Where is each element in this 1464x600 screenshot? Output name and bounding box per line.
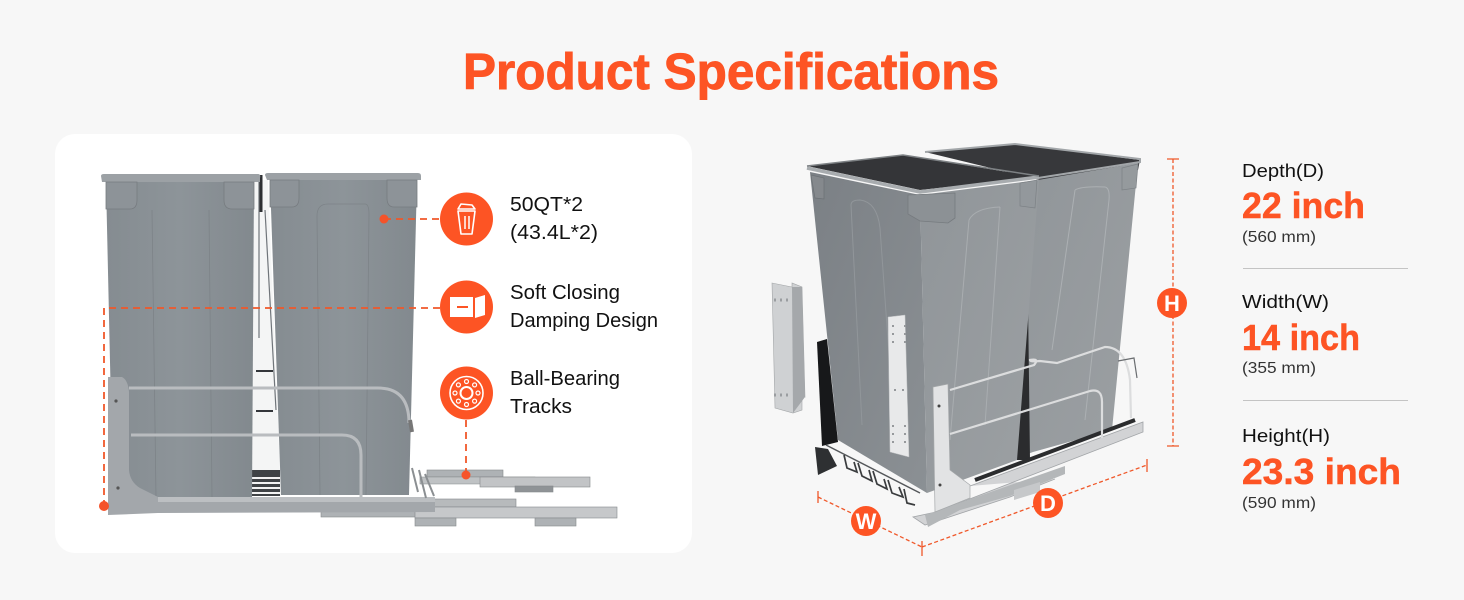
spec: width xyxy=(1242,291,1360,377)
spec: height: Height(H) xyxy=(1242,425,1330,446)
back rails xyxy=(321,470,617,526)
spec: height: (590 mm) xyxy=(1242,495,1316,512)
dimension: width: W xyxy=(856,509,877,534)
label: capacity: 50QT*2 xyxy=(510,194,583,216)
left bin xyxy=(101,174,260,497)
rear bin xyxy=(925,144,1140,460)
loose side bracket xyxy=(772,283,805,413)
front bin xyxy=(807,155,1039,493)
label: ball bearing: Tracks xyxy=(510,396,572,418)
product image: side view of pull-out bins xyxy=(101,173,617,526)
callout lines xyxy=(104,219,466,506)
spec: width: 14 inch xyxy=(1242,317,1360,358)
icon: soft closing drawer xyxy=(440,280,493,334)
frame: wires, rails and bracket xyxy=(815,347,1143,527)
label: soft closing: Soft Closing xyxy=(510,282,620,304)
product image: isometric bins xyxy=(772,144,1187,556)
spec: width: (355 mm) xyxy=(1242,360,1316,377)
spec: width: Width(W) xyxy=(1242,291,1329,312)
spec: height: 23.3 inch xyxy=(1242,451,1401,492)
spec: depth xyxy=(1242,160,1365,246)
dimension: depth xyxy=(922,459,1147,547)
label: capacity xyxy=(510,194,598,244)
white mounting plate xyxy=(888,315,909,457)
label: soft closing: Damping Design xyxy=(510,310,658,332)
dimension: depth: D xyxy=(1040,491,1056,516)
spec: depth: (560 mm) xyxy=(1242,229,1316,246)
spec: depth: Depth(D) xyxy=(1242,160,1324,181)
label: ball bearing: Ball-Bearing xyxy=(510,368,620,390)
dimension: height: H xyxy=(1164,291,1180,316)
label: capacity: (43.4L*2) xyxy=(510,222,598,244)
black rear bracket xyxy=(817,339,838,446)
spec: depth: 22 inch xyxy=(1242,185,1365,226)
dimension: width xyxy=(818,491,922,556)
label: soft closing xyxy=(510,282,658,332)
title: Product Specifications xyxy=(463,43,999,100)
frame and wire handles xyxy=(108,377,435,515)
dimension: height xyxy=(1157,159,1187,446)
spec: height xyxy=(1242,425,1401,512)
callout dots xyxy=(99,214,470,511)
panel: features xyxy=(55,134,692,553)
label: ball bearing xyxy=(510,368,620,418)
icon: bin xyxy=(440,192,493,246)
right bin xyxy=(265,173,421,495)
icon: ball bearing xyxy=(440,366,493,420)
